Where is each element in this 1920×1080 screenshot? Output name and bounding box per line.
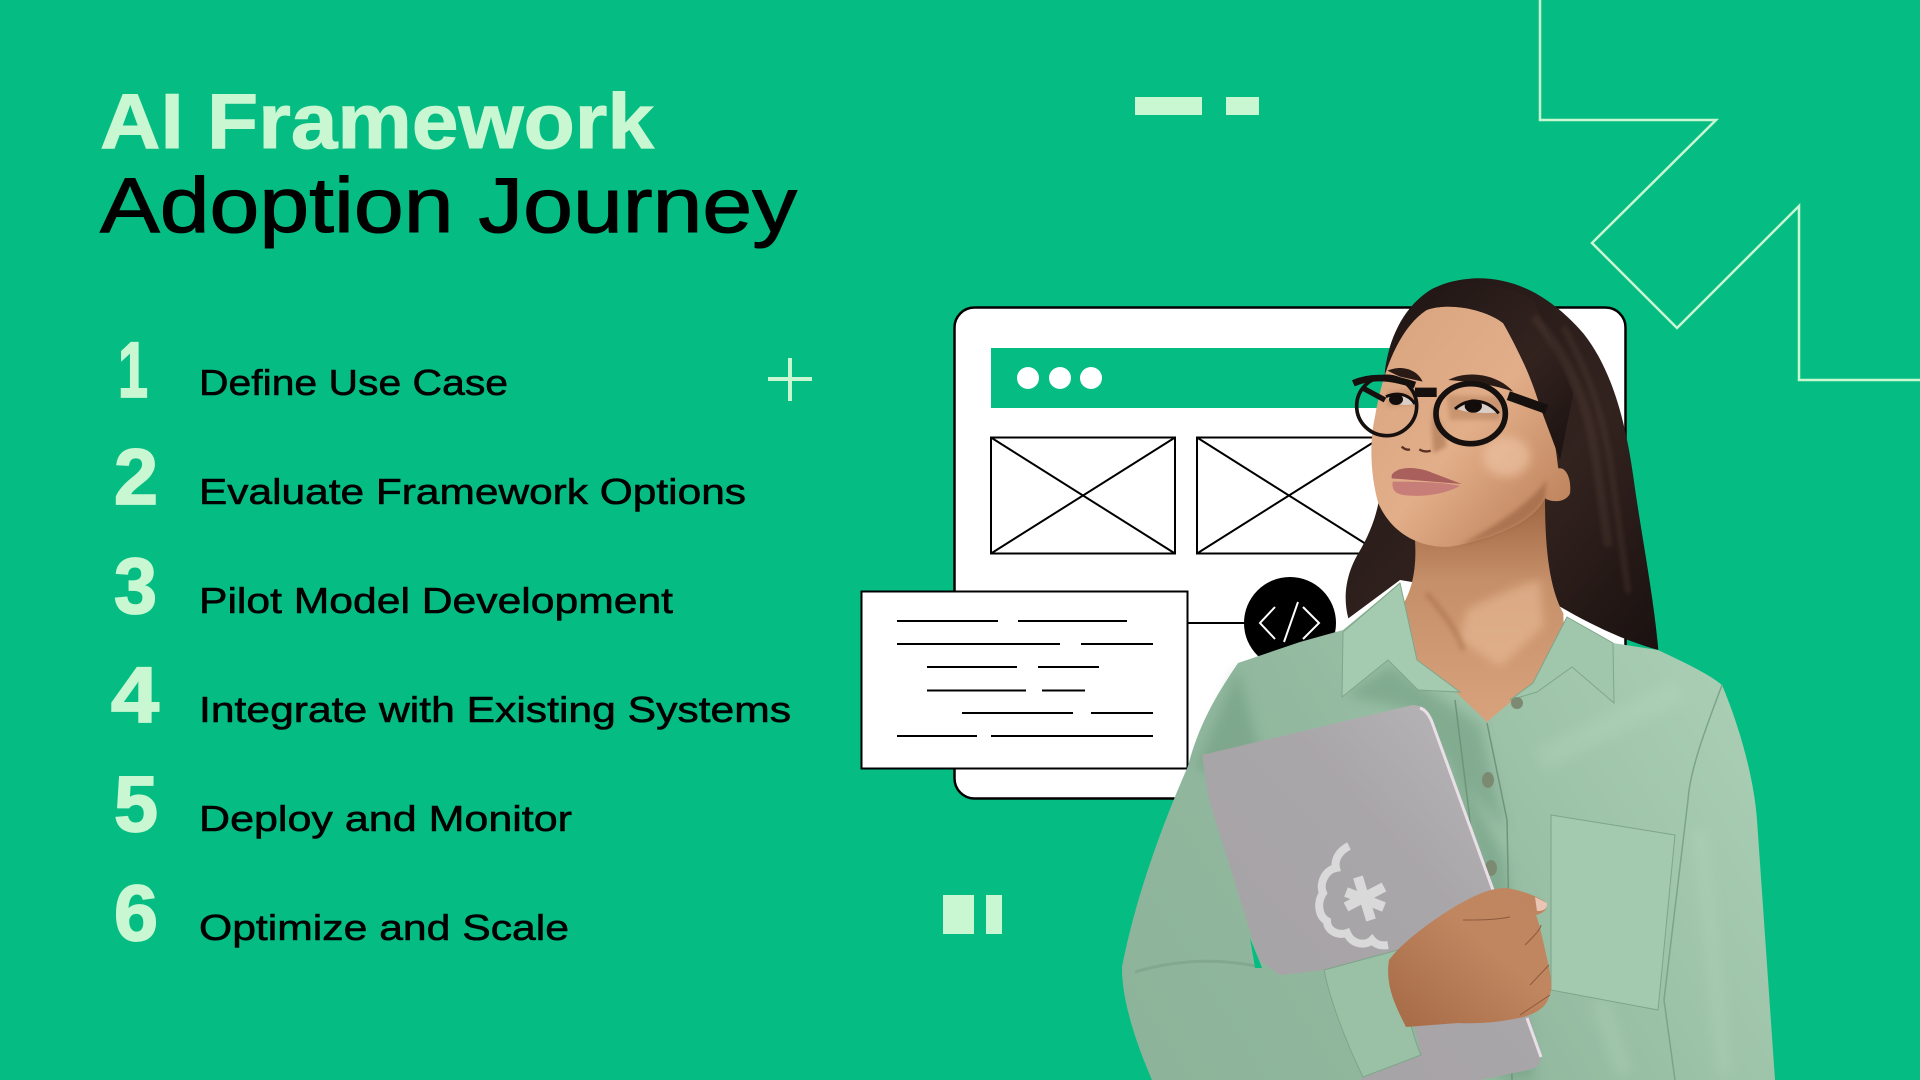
- step 4: 4: [111, 650, 159, 739]
- step 6: Optimize and Scale: [199, 907, 569, 948]
- left collar: [1342, 583, 1460, 697]
- title: [100, 77, 797, 249]
- step 6: 6: [114, 868, 158, 957]
- right eye: [1457, 402, 1497, 413]
- code icon: [1244, 577, 1336, 669]
- decorative zigzag outline: [1540, 0, 1920, 380]
- woman head: [1353, 283, 1628, 593]
- cheek highlight: [1483, 437, 1530, 477]
- code document card: [862, 592, 1188, 768]
- face: [1371, 307, 1570, 547]
- eyelashes: [1386, 394, 1499, 413]
- code lines: [897, 621, 1153, 736]
- shirt light folds: [1540, 690, 1725, 1075]
- pupils: [1389, 394, 1482, 413]
- step 5: Deploy and Monitor: [199, 798, 572, 839]
- neck highlight: [1460, 580, 1543, 667]
- front hair strand: [1385, 283, 1573, 460]
- sleeve fold line: [1135, 961, 1256, 972]
- shirt buttons: [1482, 697, 1523, 876]
- numbered steps list: [111, 325, 791, 957]
- step 3: Pilot Model Development: [199, 580, 673, 621]
- shirt shading: [1195, 665, 1535, 1080]
- decorative bars bottom: [943, 895, 1002, 934]
- lens eyelid shading: [1387, 388, 1503, 420]
- address bar: [991, 348, 1411, 408]
- step 1: [118, 325, 508, 414]
- back hair: [1346, 278, 1658, 650]
- decorative dashes top: [1135, 97, 1259, 115]
- step 5: [114, 759, 572, 848]
- sleeve cuff: [1324, 950, 1421, 1077]
- eyebrows: [1387, 368, 1513, 392]
- lips: [1392, 468, 1462, 496]
- decorative plus sign: [768, 358, 812, 401]
- laptop: [1202, 705, 1541, 1080]
- step 6: [114, 868, 569, 957]
- laptop edge highlight: [1420, 708, 1541, 1057]
- step 2: [114, 432, 746, 521]
- laptop arm gap: [1250, 938, 1262, 968]
- browser window wireframe: [954, 308, 1626, 798]
- step 3: 3: [114, 541, 157, 630]
- neck tendon shadow: [1427, 593, 1463, 650]
- title: Adoption Journey: [100, 161, 797, 249]
- top rim left: [1353, 378, 1415, 385]
- nostrils: [1402, 447, 1431, 451]
- neck: [1397, 498, 1567, 733]
- glasses: [1353, 376, 1547, 444]
- step 5: 5: [114, 759, 158, 848]
- jaw shadow: [1460, 480, 1547, 545]
- connector line: [1188, 622, 1250, 624]
- hair sheen: [1533, 317, 1628, 593]
- glasses arm: [1508, 396, 1547, 409]
- glasses bridge: [1415, 378, 1437, 406]
- step 2: Evaluate Framework Options: [199, 471, 746, 512]
- step 1: Define Use Case: [199, 362, 508, 403]
- step 3: [114, 541, 673, 630]
- step 1: 1: [118, 325, 148, 414]
- nose shadow: [1432, 407, 1446, 453]
- window dots: [1017, 367, 1102, 389]
- title: AI Framework: [100, 77, 655, 165]
- green shirt: [1122, 583, 1775, 1080]
- image placeholder 1: [991, 438, 1175, 554]
- woman back hair and neck: [1346, 278, 1658, 733]
- image placeholder 2: [1197, 438, 1381, 554]
- shirt pocket: [1551, 815, 1675, 1010]
- step 2: 2: [114, 432, 158, 521]
- woman body: [1122, 583, 1775, 1080]
- far arm: [1363, 388, 1385, 400]
- finger details: [1463, 897, 1550, 1015]
- laptop logo: [1319, 846, 1388, 945]
- sleeve seam: [1664, 685, 1722, 1080]
- rolled sleeve: [1122, 950, 1421, 1080]
- step 4: [111, 650, 791, 739]
- right collar: [1510, 617, 1614, 703]
- hand: [1388, 888, 1551, 1027]
- shirt placket: [1455, 700, 1512, 1080]
- step 4: Integrate with Existing Systems: [199, 689, 791, 730]
- left eye: [1387, 395, 1414, 405]
